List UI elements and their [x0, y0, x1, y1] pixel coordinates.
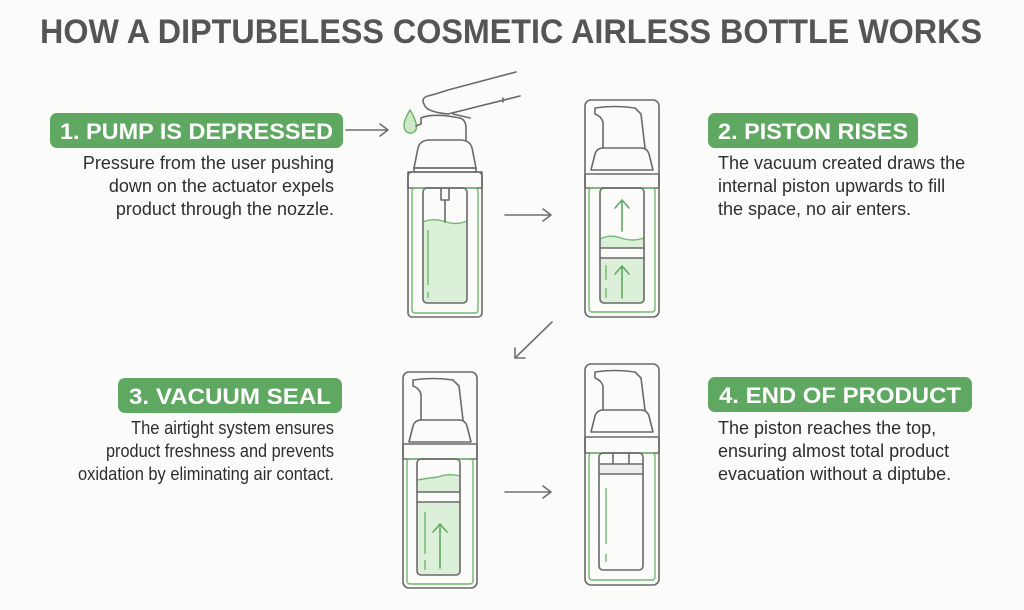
text: step 1: product through the nozzle.	[116, 199, 334, 219]
panel: step 2	[708, 113, 965, 219]
label: step 1: 1. PUMP IS DEPRESSED	[60, 119, 333, 144]
text: step 2: The vacuum created draws the	[718, 153, 965, 173]
text: step 3: The airtight system ensures	[131, 418, 334, 438]
text: step 2: the space, no air enters.	[718, 199, 911, 219]
label: step 2	[708, 113, 918, 148]
text: step 3: oxidation by eliminating air contact.	[78, 464, 334, 484]
text: step 4: ensuring almost total product	[718, 441, 949, 461]
text: step 4: The piston reaches the top,	[718, 418, 936, 438]
arrow: label to bottle 1	[346, 124, 388, 136]
text: step 4: evacuation without a diptube.	[718, 464, 951, 484]
panel: step 3	[78, 378, 342, 484]
text: step 1: down on the actuator expels	[109, 176, 334, 196]
icon: up arrows	[615, 200, 629, 298]
arrow: 2 to 3	[515, 322, 552, 358]
title: HOW A DIPTUBELESS COSMETIC AIRLESS BOTTLE WORKS	[40, 13, 982, 51]
panel: step 4	[708, 377, 972, 484]
text: step 2: internal piston upwards to fill	[718, 176, 945, 196]
label: step 4: 4. END OF PRODUCT	[719, 383, 962, 408]
panel: step 1	[50, 113, 343, 219]
text: step 3: product freshness and prevents	[106, 441, 334, 461]
label: step 3: 3. VACUUM SEAL	[129, 384, 331, 409]
bottle 3: vacuum seal	[403, 372, 477, 588]
arrow: 1 to 2	[505, 209, 551, 221]
bottle 1: pump depressed	[404, 72, 520, 317]
bottle 2: piston rises	[585, 100, 659, 317]
label: step 1	[50, 113, 343, 148]
icon: drop	[404, 110, 416, 133]
icon: up arrow	[433, 524, 447, 568]
text: step 1: Pressure from the user pushing	[83, 153, 334, 173]
label: step 2: 2. PISTON RISES	[718, 119, 908, 144]
label: step 3	[118, 378, 342, 413]
bottle 4: end of product	[585, 364, 659, 585]
arrow: 3 to 4	[505, 486, 551, 498]
label: step 4	[708, 377, 972, 412]
icon: finger	[423, 72, 520, 118]
